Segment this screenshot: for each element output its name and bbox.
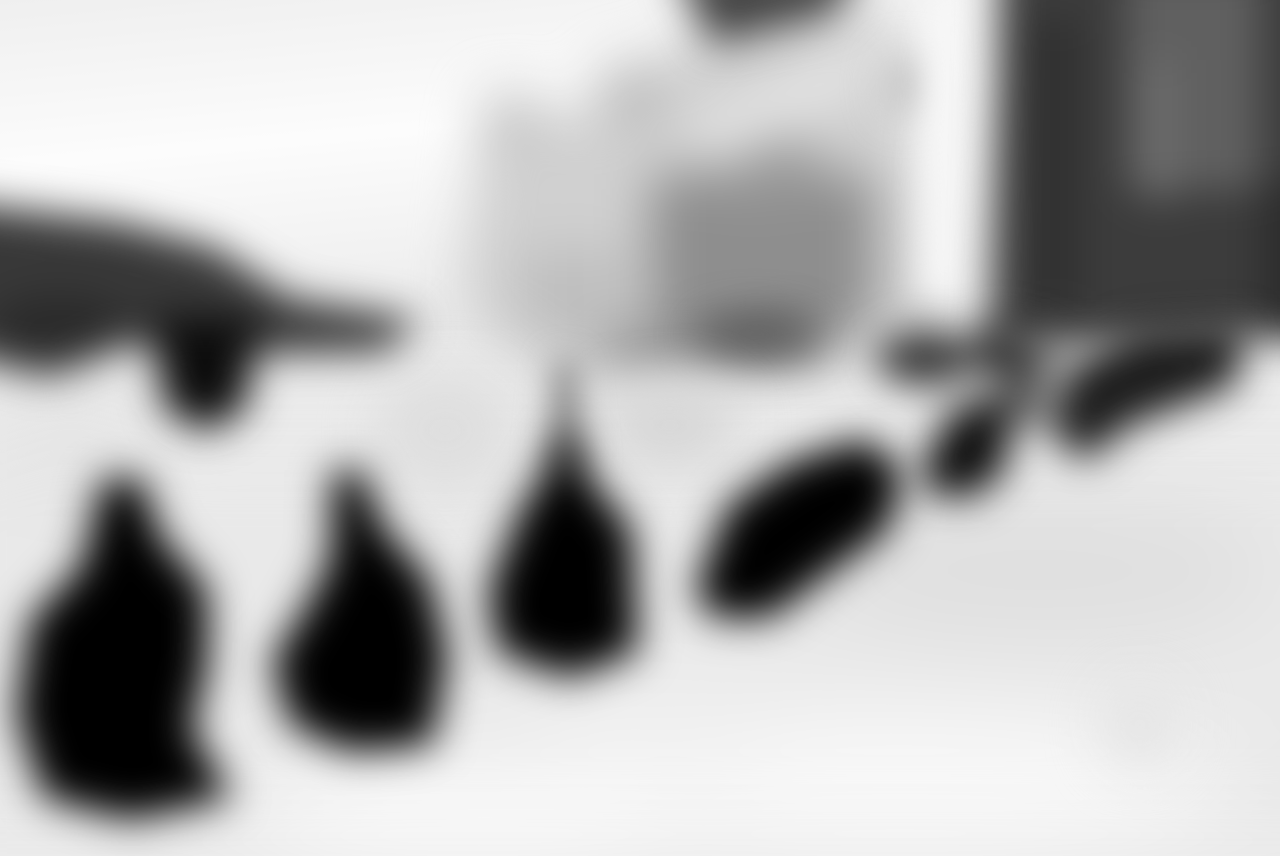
background: snow ground — [0, 380, 1280, 856]
building detail — [695, 55, 932, 355]
dark hill on the left — [0, 200, 420, 432]
dark roof top — [672, 0, 865, 45]
background: sky — [0, 0, 1280, 330]
middle building — [465, 10, 930, 380]
neck joining building to figure three — [545, 360, 588, 470]
figure 3 — [488, 430, 638, 678]
figure 1 — [16, 478, 232, 820]
faint snow mound — [1102, 683, 1178, 767]
figure 2 — [272, 470, 448, 752]
figure 4 — [695, 438, 905, 618]
snow patches in front of the building — [375, 370, 740, 490]
dark right building — [990, 0, 1280, 350]
white building edge — [920, 0, 982, 300]
background figures right — [875, 324, 1245, 498]
